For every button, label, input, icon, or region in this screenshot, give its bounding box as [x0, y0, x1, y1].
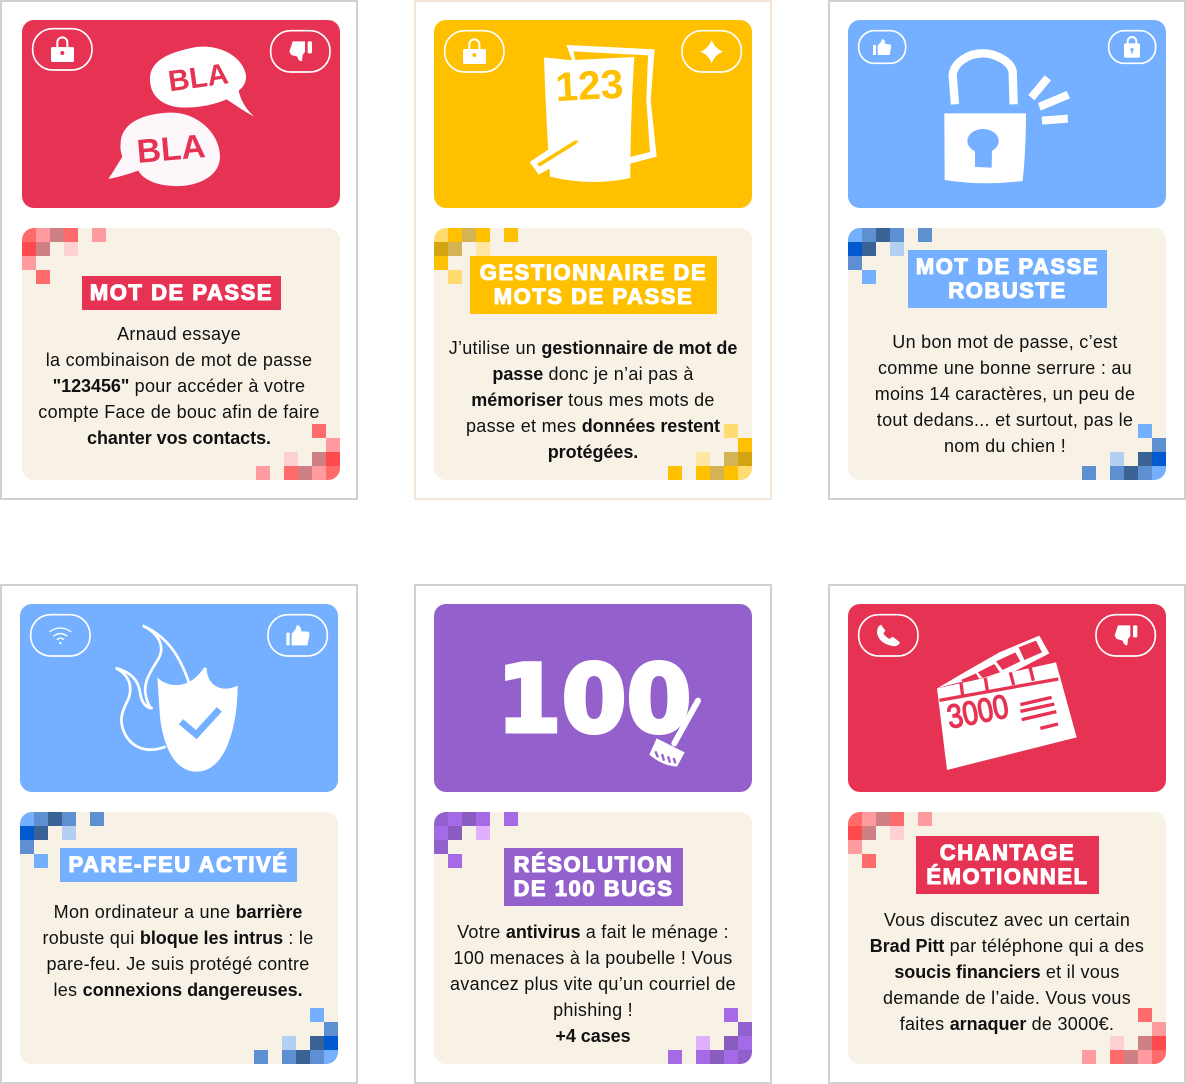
icon: flame and shield	[116, 626, 238, 772]
body text: Arnaud essaye	[117, 324, 241, 344]
card: mot de passe robuste	[828, 0, 1186, 500]
badge: thumbs up	[859, 31, 906, 63]
illustration panel: bla bla	[22, 20, 340, 208]
card: pare-feu activé	[0, 584, 358, 1084]
body text: protégées.	[548, 442, 638, 462]
illustration panel: password manager	[434, 20, 752, 208]
badge: lock	[33, 29, 92, 70]
heading: MOT DE PASSE	[90, 280, 273, 305]
body text: 100 menaces à la poubelle ! Vous	[453, 948, 733, 968]
pixel decoration	[20, 812, 338, 1064]
body text: Mon ordinateur a une barrière	[54, 902, 302, 922]
body text: moins 14 caractères, un peu de	[875, 384, 1135, 404]
icon: sheets with 123 and pencil	[530, 45, 657, 182]
body text: phishing !	[553, 1000, 633, 1020]
body text: les connexions dangereuses.	[53, 980, 303, 1000]
badge: lock	[445, 31, 504, 72]
heading	[504, 848, 683, 906]
body text: chanter vos contacts.	[87, 428, 271, 448]
heading	[82, 276, 281, 310]
body text: faites arnaquer de 3000€.	[900, 1014, 1114, 1034]
body text	[450, 922, 736, 1046]
icon: sheets with 123 and pencil: 123	[554, 61, 624, 110]
heading: CHANTAGE	[940, 840, 1075, 865]
pixel decoration	[848, 228, 1166, 480]
badge: thumbs up	[268, 615, 327, 656]
body text: Vous discutez avec un certain	[884, 910, 1130, 930]
badge: thumbs down	[271, 31, 330, 72]
heading: PARE-FEU ACTIVÉ	[68, 852, 289, 877]
pixel decoration	[22, 228, 340, 480]
badge: sparkle	[682, 31, 741, 72]
heading: MOTS DE PASSE	[494, 284, 693, 309]
illustration panel: firewall	[20, 604, 338, 792]
heading	[916, 836, 1099, 894]
body text: J’utilise un gestionnaire de mot de	[449, 338, 737, 358]
pixel decoration	[434, 812, 752, 1064]
body text: nom du chien !	[944, 436, 1066, 456]
illustration panel: 100 and broom	[434, 604, 752, 792]
heading: MOT DE PASSE	[916, 254, 1099, 279]
body text: la combinaison de mot de passe	[46, 350, 312, 370]
illustration panel: padlock	[848, 20, 1166, 208]
icon: bottom speech bubble	[108, 113, 220, 186]
body text: passe et mes données restent	[466, 416, 720, 436]
heading	[470, 256, 717, 314]
icon: bottom speech bubble: BLA	[135, 128, 207, 171]
body text	[875, 332, 1135, 456]
heading: ROBUSTE	[948, 278, 1067, 303]
icon: padlock with rays	[944, 53, 1070, 183]
text panel	[20, 812, 338, 1064]
text panel	[848, 228, 1166, 480]
heading: RÉSOLUTION	[514, 852, 673, 877]
icon: broom	[649, 701, 698, 767]
icon: top speech bubble	[150, 47, 254, 117]
body text	[870, 910, 1144, 1034]
text panel	[22, 228, 340, 480]
body text: Un bon mot de passe, c’est	[892, 332, 1118, 352]
body text: robuste qui bloque les intrus : le	[42, 928, 314, 948]
body text: comme une bonne serrure : au	[878, 358, 1132, 378]
badge: lock	[1109, 31, 1156, 63]
number: 100: 100	[497, 645, 691, 754]
pixel decoration	[434, 228, 752, 480]
body text	[42, 902, 314, 1000]
card: chantage émotionnel	[828, 584, 1186, 1084]
badge: thumbs down	[1096, 615, 1155, 656]
illustration panel: clapperboard	[848, 604, 1166, 792]
body text	[449, 338, 737, 462]
body text: passe donc je n’ai pas à	[492, 364, 694, 384]
heading	[908, 250, 1107, 308]
body text: compte Face de bouc afin de faire	[38, 402, 320, 422]
body text: pare-feu. Je suis protégé contre	[46, 954, 310, 974]
body text	[38, 324, 320, 448]
body text: soucis financiers et il vous	[894, 962, 1120, 982]
heading: ÉMOTIONNEL	[926, 864, 1089, 889]
pixel decoration	[848, 812, 1166, 1064]
body text: Brad Pitt par téléphone qui a des	[870, 936, 1144, 956]
text panel	[848, 812, 1166, 1064]
body text: demande de l’aide. Vous vous	[883, 988, 1131, 1008]
icon: top speech bubble: BLA	[166, 57, 230, 98]
text panel	[434, 228, 752, 480]
heading	[60, 848, 297, 882]
badge: wifi	[31, 615, 90, 656]
card: mot de passe	[0, 0, 358, 500]
text panel	[434, 812, 752, 1064]
heading: DE 100 BUGS	[513, 876, 674, 901]
body text: tout dedans... et surtout, pas le	[877, 410, 1133, 430]
icon: clapperboard 3000	[937, 636, 1077, 770]
heading: GESTIONNAIRE DE	[480, 260, 707, 285]
body text: "123456" pour accéder à votre	[53, 376, 305, 396]
badge: phone	[859, 615, 918, 656]
icon: clapperboard 3000: 3000	[944, 688, 1012, 736]
card: gestionnaire de mots de passe	[414, 0, 772, 500]
body text: avancez plus vite qu’un courriel de	[450, 974, 736, 994]
body text: mémoriser tous mes mots de	[471, 390, 715, 410]
body text: Votre antivirus a fait le ménage :	[457, 922, 729, 942]
body text: +4 cases	[555, 1026, 631, 1046]
card: résolution de 100 bugs	[414, 584, 772, 1084]
